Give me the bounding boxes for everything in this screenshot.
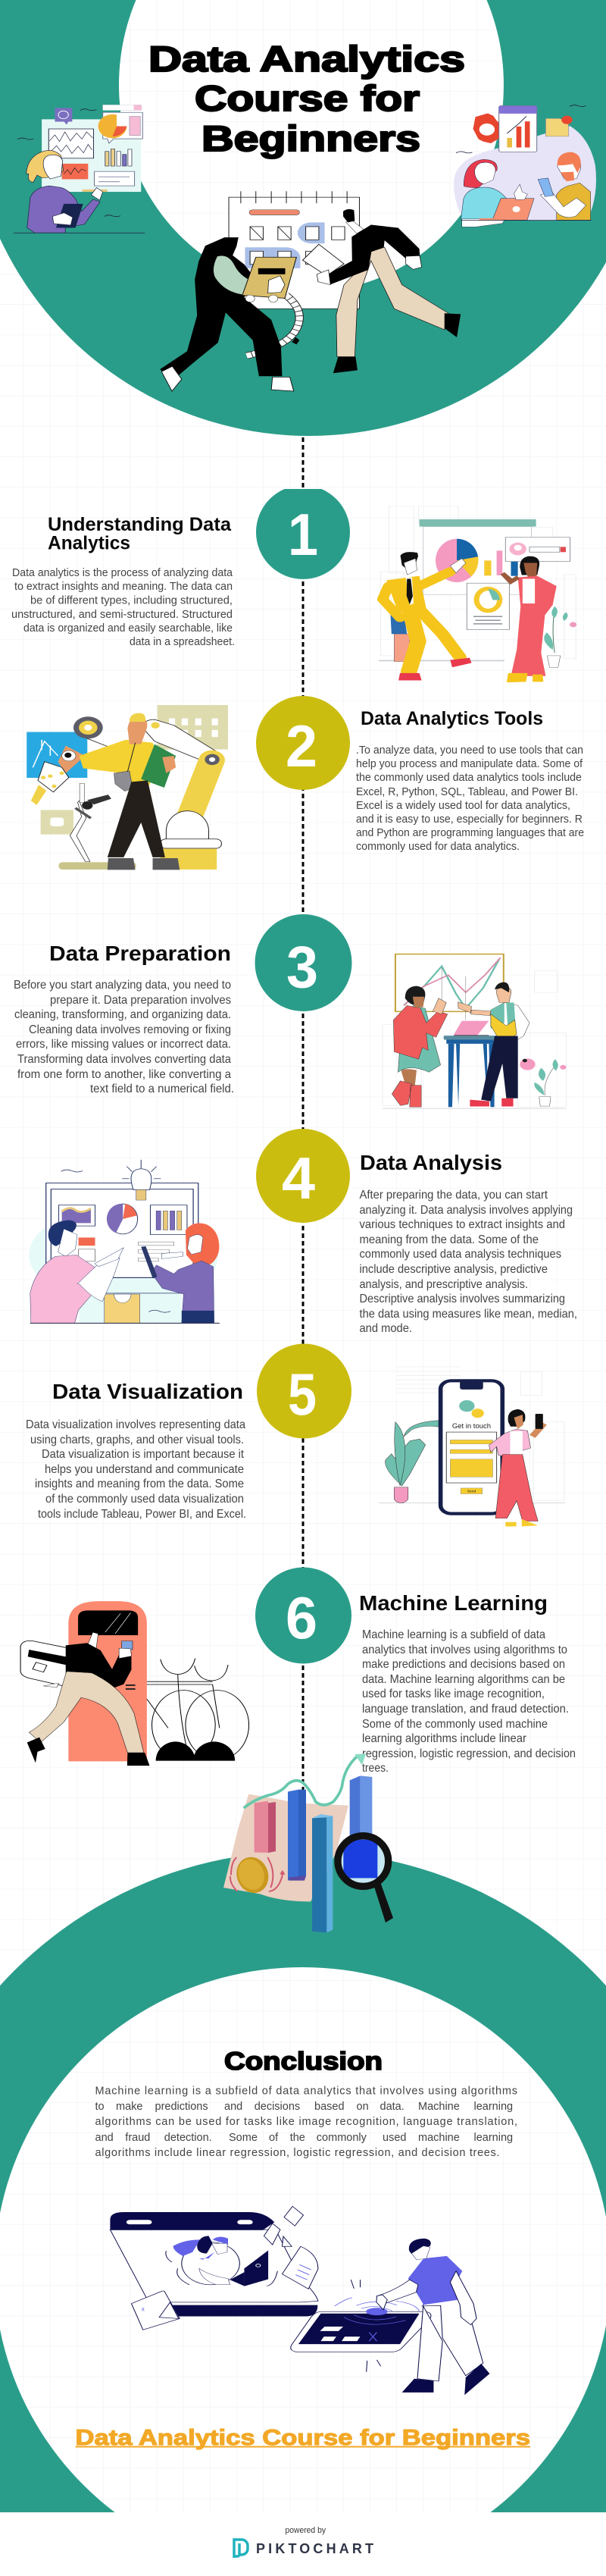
left figure with box bbox=[160, 237, 299, 391]
conclusion body text: decisions bbox=[255, 2101, 303, 2113]
step 1 body text: be of different types, including structured, bbox=[30, 594, 233, 606]
step 6 body text: Some of the commonly used machine bbox=[362, 1718, 548, 1731]
title: Course for bbox=[195, 78, 420, 118]
step 6 body text: learning algorithms include linear bbox=[362, 1732, 527, 1745]
back blue bar bbox=[350, 1775, 372, 1838]
conclusion body text: learning bbox=[474, 2132, 513, 2144]
conclusion body text: and bbox=[224, 2101, 245, 2113]
step 2 body text: .To analyze data, you need to use tools that can bbox=[356, 744, 583, 757]
step 1 body text: data in a spreadsheet. bbox=[130, 635, 235, 648]
conclusion body text: data. bbox=[380, 2101, 408, 2113]
step 1 heading: Analytics bbox=[48, 532, 130, 553]
step 6 body text: make predictions and decisions based on bbox=[362, 1658, 565, 1671]
right figure with document bbox=[302, 209, 461, 373]
step 2 body text: the commonly used data analytics tools include bbox=[356, 771, 582, 784]
step 4 heading: Data Analysis bbox=[360, 1151, 502, 1174]
tall teal-blue bar bbox=[312, 1814, 333, 1932]
conclusion body text: predictions bbox=[155, 2101, 211, 2113]
step 4 body text bbox=[359, 1189, 577, 1335]
step 3 body text: Before you start analyzing data, you need to bbox=[14, 979, 231, 992]
calendar bbox=[229, 191, 359, 309]
step 5 body text: insights and meaning from the data. Some bbox=[35, 1478, 244, 1490]
conclusion heading: Conclusion bbox=[224, 2047, 383, 2075]
conclusion body text: to bbox=[95, 2101, 105, 2113]
conclusion body text: on bbox=[356, 2101, 372, 2113]
conclusion body text: learning bbox=[474, 2101, 513, 2113]
step 4 body text: analyzing it. Data analysis involves applying bbox=[359, 1204, 573, 1217]
step 5 body text: using charts, graphs, and other visual tools. bbox=[30, 1434, 244, 1446]
step 5 number badge bbox=[257, 1343, 351, 1439]
step 4 body text: analysis, and prescriptive analysis. bbox=[359, 1278, 528, 1291]
conclusion body text: make bbox=[116, 2101, 145, 2113]
step 2 body text: Excel is a widely used tool for data analytics, bbox=[356, 799, 570, 812]
step 1 heading: Understanding Data bbox=[48, 514, 232, 535]
title: Data Analytics bbox=[148, 39, 465, 79]
step 5 body text: helps you understand and communicate bbox=[45, 1463, 244, 1476]
conclusion body text: Machine learning is a subfield of data analytics that involves using algorithms bbox=[95, 2085, 517, 2097]
conclusion body text: fraud bbox=[125, 2132, 153, 2144]
step 3 heading: Data Preparation bbox=[49, 942, 231, 965]
conclusion body text: used bbox=[383, 2132, 409, 2144]
step 5 body text: tools include Tableau, Power BI, and Excel. bbox=[38, 1508, 246, 1521]
illustration: phone contact form with woman and plant bbox=[379, 1367, 565, 1526]
3D bar chart with magnifier bbox=[223, 1753, 393, 1932]
step 6 number badge bbox=[255, 1568, 351, 1663]
step 1 body text: Data analytics is the process of analyzing data bbox=[12, 566, 233, 579]
woman with phone bbox=[489, 1409, 547, 1526]
step 6 body text: language translation, and fraud detection. bbox=[362, 1703, 569, 1716]
step 4 body text: the data using measures like mean, median, bbox=[359, 1308, 577, 1321]
conclusion body text: algorithms include linear regression, logistic regression, and decision trees. bbox=[95, 2147, 500, 2159]
step 4 body text: commonly used data analysis techniques bbox=[359, 1248, 561, 1261]
step 6 body text: Machine learning is a subfield of data bbox=[362, 1628, 545, 1641]
step 6 body text: used for tasks like image recognition, bbox=[362, 1688, 545, 1700]
woman in coral suit bbox=[501, 556, 576, 682]
step 1 body text: to extract insights and meaning. The data can bbox=[14, 580, 233, 593]
blue bar bbox=[288, 1790, 306, 1881]
illustration: window with person on laptop and man tapping tablet: x bbox=[142, 2306, 145, 2313]
step 2 body text: help you process and manipulate data. Some of bbox=[356, 757, 583, 770]
footer band bbox=[0, 2512, 606, 2576]
step 2 body text: and it is easy to use, especially for beginners. R bbox=[356, 813, 583, 826]
step 6 body text: data. Machine learning algorithms can be bbox=[362, 1673, 565, 1686]
woman with orange hair bbox=[141, 1224, 219, 1323]
illustration: phone contact form with woman and plant: Get in touch bbox=[452, 1422, 491, 1431]
step 3 body text: text field to a numerical field. bbox=[90, 1083, 234, 1095]
man tapping tablet bbox=[376, 2239, 489, 2395]
man in yellow suit bbox=[383, 552, 471, 680]
tablet bbox=[291, 2280, 431, 2372]
step 4 body text: After preparing the data, you can start bbox=[359, 1189, 548, 1202]
illustration: person at salmon kiosk with bicycle bbox=[20, 1601, 249, 1766]
conclusion body text: algorithms can be used for tasks like image recognition, language translation, bbox=[95, 2116, 517, 2128]
step 1 heading bbox=[48, 514, 232, 553]
conclusion body text: Some bbox=[229, 2132, 261, 2144]
step 3 body text bbox=[14, 979, 234, 1095]
step 5 heading: Data Visualization bbox=[52, 1380, 243, 1403]
step 3 number badge bbox=[255, 914, 351, 1011]
step 4 body text: various techniques to extract insights and bbox=[359, 1218, 565, 1231]
step 4 body text: Descriptive analysis involves summarizing bbox=[359, 1293, 565, 1305]
footer: powered by piktochart: PIKTOCHART bbox=[256, 2541, 373, 2556]
step 4 number badge bbox=[256, 1129, 350, 1223]
coin bbox=[230, 1853, 286, 1898]
bottom teal arch bbox=[0, 1851, 606, 2576]
step 6 heading: Machine Learning bbox=[359, 1591, 548, 1615]
step 2 body text: and Python are programming languages that are bbox=[356, 826, 584, 839]
title: Beginners bbox=[201, 118, 420, 158]
title bbox=[148, 39, 465, 158]
icon: two colleagues reviewing data bbox=[454, 105, 596, 227]
top teal ring bbox=[0, 0, 606, 436]
step 5 body text: of the commonly used data visualization bbox=[45, 1493, 244, 1506]
step 2 body text bbox=[356, 744, 584, 853]
step 4 number badge: 4 bbox=[282, 1145, 315, 1211]
step 6 body text: analytics that involves using algorithms to bbox=[362, 1644, 567, 1656]
timeline dashed line bbox=[301, 437, 305, 1791]
step 1 body text: unstructured, and semi-structured. Structured bbox=[11, 608, 233, 621]
step 3 body text: Cleaning data involves removing or fixing bbox=[29, 1023, 231, 1036]
step 1 body text: data is organized and easily searchable, like bbox=[23, 622, 233, 635]
step 6 number badge: 6 bbox=[286, 1584, 317, 1651]
pink bar bbox=[255, 1801, 276, 1853]
illustration: window with person on laptop and man tapping tablet bbox=[110, 2206, 489, 2395]
step 2 number badge: 2 bbox=[286, 713, 317, 779]
step 3 body text: from one form to another, like converting a bbox=[17, 1068, 231, 1081]
step 3 number badge: 3 bbox=[286, 934, 318, 1001]
step 1 number badge: 1 bbox=[288, 501, 318, 568]
footer: powered by piktochart: powered by bbox=[285, 2526, 326, 2535]
trend arrow bbox=[244, 1753, 366, 1808]
icon: woman analyst with charts bbox=[14, 105, 145, 233]
conclusion body text: and bbox=[95, 2132, 114, 2144]
step 5 number badge: 5 bbox=[288, 1361, 317, 1427]
conclusion body text: of bbox=[269, 2132, 281, 2144]
icon: calendar with two people carrying box and paper bbox=[160, 191, 461, 391]
step 6 body text: trees. bbox=[362, 1762, 389, 1775]
step 5 body text: Data visualization involves representing data bbox=[26, 1418, 245, 1431]
step 6 body text: regression, logistic regression, and decision bbox=[362, 1747, 576, 1760]
illustration: phone contact form with woman and plant: Send bbox=[467, 1490, 476, 1494]
conclusion body text: detection. bbox=[164, 2132, 215, 2144]
conclusion body text: machine bbox=[418, 2132, 463, 2144]
person on laptop bbox=[166, 2236, 277, 2286]
step 2 heading: Data Analytics Tools bbox=[361, 708, 543, 729]
step 5 body text: Data visualization is important because it bbox=[42, 1448, 245, 1461]
step 5 body text bbox=[26, 1418, 246, 1521]
illustration: two people with line chart and desk bbox=[383, 954, 566, 1108]
conclusion body text: the bbox=[290, 2132, 308, 2144]
step 4 body text: include descriptive analysis, predictive bbox=[359, 1263, 548, 1276]
step 2 body text: Excel, R, Python, SQL, Tableau, and Power BI. bbox=[356, 785, 578, 798]
step 3 body text: errors, like missing values or incorrect data. bbox=[16, 1038, 231, 1051]
conclusion body text: based bbox=[314, 2101, 348, 2113]
step 6 body text bbox=[362, 1628, 576, 1775]
illustration: two analysts at dashboard monitor bbox=[29, 1160, 220, 1323]
conclusion body text: commonly bbox=[317, 2132, 370, 2144]
step 2 number badge bbox=[256, 696, 350, 790]
step 2 body text: commonly used for data analytics. bbox=[356, 840, 520, 853]
illustration: man and woman presenting charts bbox=[379, 506, 576, 682]
step 1 number badge bbox=[256, 485, 350, 579]
magnifying glass bbox=[338, 1836, 393, 1923]
step 3 body text: Transforming data involves converting data bbox=[17, 1053, 231, 1066]
conclusion body text: Machine bbox=[418, 2101, 463, 2113]
man in pink shirt bbox=[30, 1220, 123, 1323]
conclusion body text bbox=[95, 2085, 517, 2159]
step 3 body text: prepare it. Data preparation involves bbox=[50, 994, 231, 1007]
step 4 body text: and mode. bbox=[359, 1322, 412, 1335]
closing title link text: Data Analytics Course for Beginners bbox=[76, 2426, 530, 2450]
piktochart logo mark bbox=[234, 2540, 248, 2558]
footer: powered by piktochart bbox=[234, 2526, 373, 2558]
step 4 body text: meaning from the data. Some of the bbox=[359, 1233, 539, 1246]
step 1 body text bbox=[11, 566, 235, 648]
illustration: worker with robotic arm bbox=[27, 705, 228, 870]
step 3 body text: cleaning, transforming, and organizing data. bbox=[14, 1008, 231, 1021]
